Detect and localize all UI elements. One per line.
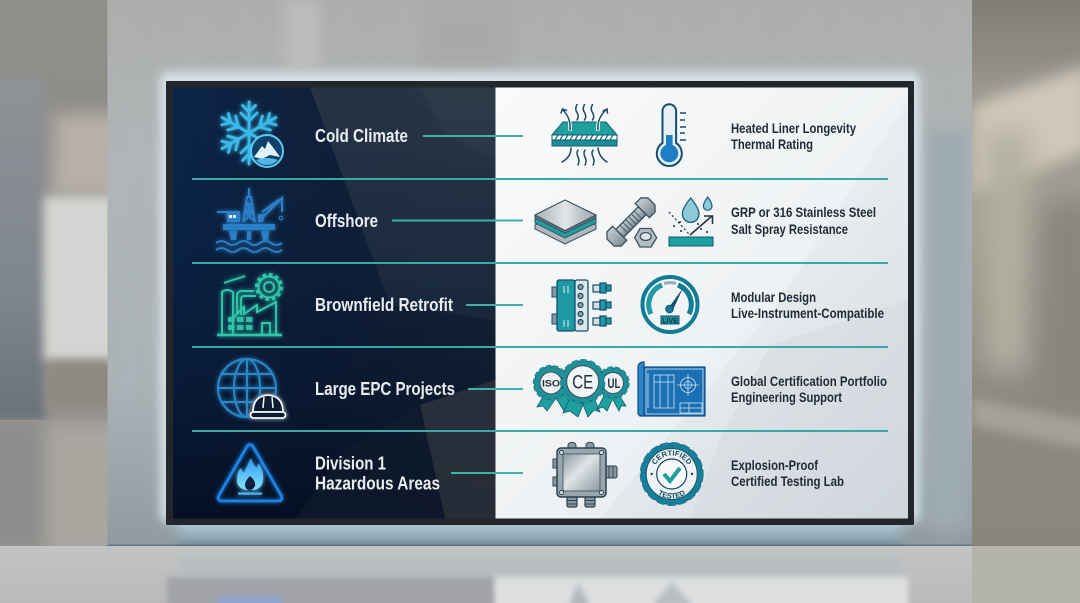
background: right room (972, 0, 1080, 546)
text: Heated Liner Longevity, Thermal Rating: Heated Liner Longevity (731, 120, 856, 136)
text: Heated Liner Longevity, Thermal Rating (731, 120, 856, 152)
panel: right light side (496, 88, 908, 518)
row 2: Offshore (216, 188, 876, 252)
text: Explosion-Proof, Certified Testing Lab: Explosion-Proof (731, 457, 818, 473)
icon: thermometer (657, 104, 686, 166)
label: Cold Climate: Cold Climate (315, 126, 408, 146)
panel: left dark side (173, 88, 496, 518)
row dividers (192, 178, 888, 432)
text: Explosion-Proof, Certified Testing Lab: Certified Testing Lab (731, 473, 844, 489)
label: Brownfield Retrofit: Brownfield Retrofit (315, 295, 453, 315)
row 5: Division 1 Hazardous Areas (214, 440, 844, 508)
icon: flame hazard triangle (218, 444, 282, 501)
label: Division 1 Hazardous Areas (315, 454, 440, 494)
icon: engineering blueprint (638, 362, 705, 416)
row 4: Large EPC Projects (218, 359, 887, 418)
label: Offshore: Offshore (315, 211, 378, 231)
text: GRP or 316 Stainless Steel, Salt Spray Resistance: GRP or 316 Stainless Steel (731, 204, 876, 220)
icon: certified tested seal: TESTED (659, 490, 685, 498)
text: Modular Design, Live-Instrument-Compatible (731, 289, 884, 321)
icon: live gauge (642, 277, 698, 332)
text: GRP or 316 Stainless Steel, Salt Spray Resistance: Salt Spray Resistance (731, 221, 848, 237)
text: Heated Liner Longevity, Thermal Rating: Thermal Rating (731, 136, 813, 152)
floor with reflection (0, 546, 1080, 603)
connector line (392, 220, 523, 222)
icon: certification badges: UL (608, 375, 621, 391)
icon: globe with hard hat (218, 359, 286, 418)
icon: certification badges: ISO (542, 378, 560, 390)
connector line (423, 135, 523, 137)
icon: certified tested seal: CERTIFIED (652, 450, 692, 464)
icon: certified tested seal (640, 442, 704, 506)
background: left room (0, 0, 108, 546)
icon: factory with gear (217, 274, 282, 335)
row 1: Cold Climate (218, 102, 856, 167)
icon: offshore oil rig (216, 188, 283, 252)
icon: certification badges: CE (572, 372, 593, 394)
label: Large EPC Projects: Large EPC Projects (315, 379, 455, 399)
connector line (451, 472, 523, 474)
display frame (166, 81, 914, 525)
icon: bolt and nut (603, 194, 659, 250)
icon: modular block (552, 280, 611, 331)
text: Explosion-Proof, Certified Testing Lab (731, 457, 844, 489)
icon: certification badges (534, 360, 628, 417)
label: Division 1 Hazardous Areas: Hazardous Areas (315, 474, 440, 494)
icon: snowflake with mountain badge (218, 102, 283, 167)
icon: live gauge: LIVE (662, 318, 678, 325)
screen backlight glow (108, 72, 972, 547)
icon: heated liner (552, 104, 617, 165)
text: Global Certification Portfolio, Engineering Support (731, 373, 887, 405)
text: Global Certification Portfolio, Engineering Support: Global Certification Portfolio (731, 373, 887, 389)
row 3: Brownfield Retrofit (217, 274, 884, 335)
icon: material sheets (535, 200, 596, 244)
icon: salt spray resistance (669, 197, 713, 246)
text: GRP or 316 Stainless Steel, Salt Spray Resistance (731, 204, 876, 237)
connector line (468, 388, 523, 390)
text: Modular Design, Live-Instrument-Compatible: Modular Design (731, 289, 816, 305)
background: concrete wall (108, 0, 972, 546)
connector line (466, 304, 523, 306)
label: Division 1 Hazardous Areas: Division 1 (315, 454, 386, 474)
icon: explosion-proof junction box (553, 442, 617, 507)
text: Global Certification Portfolio, Engineering Support: Engineering Support (731, 389, 842, 405)
text: Modular Design, Live-Instrument-Compatible: Live-Instrument-Compatible (731, 305, 884, 321)
